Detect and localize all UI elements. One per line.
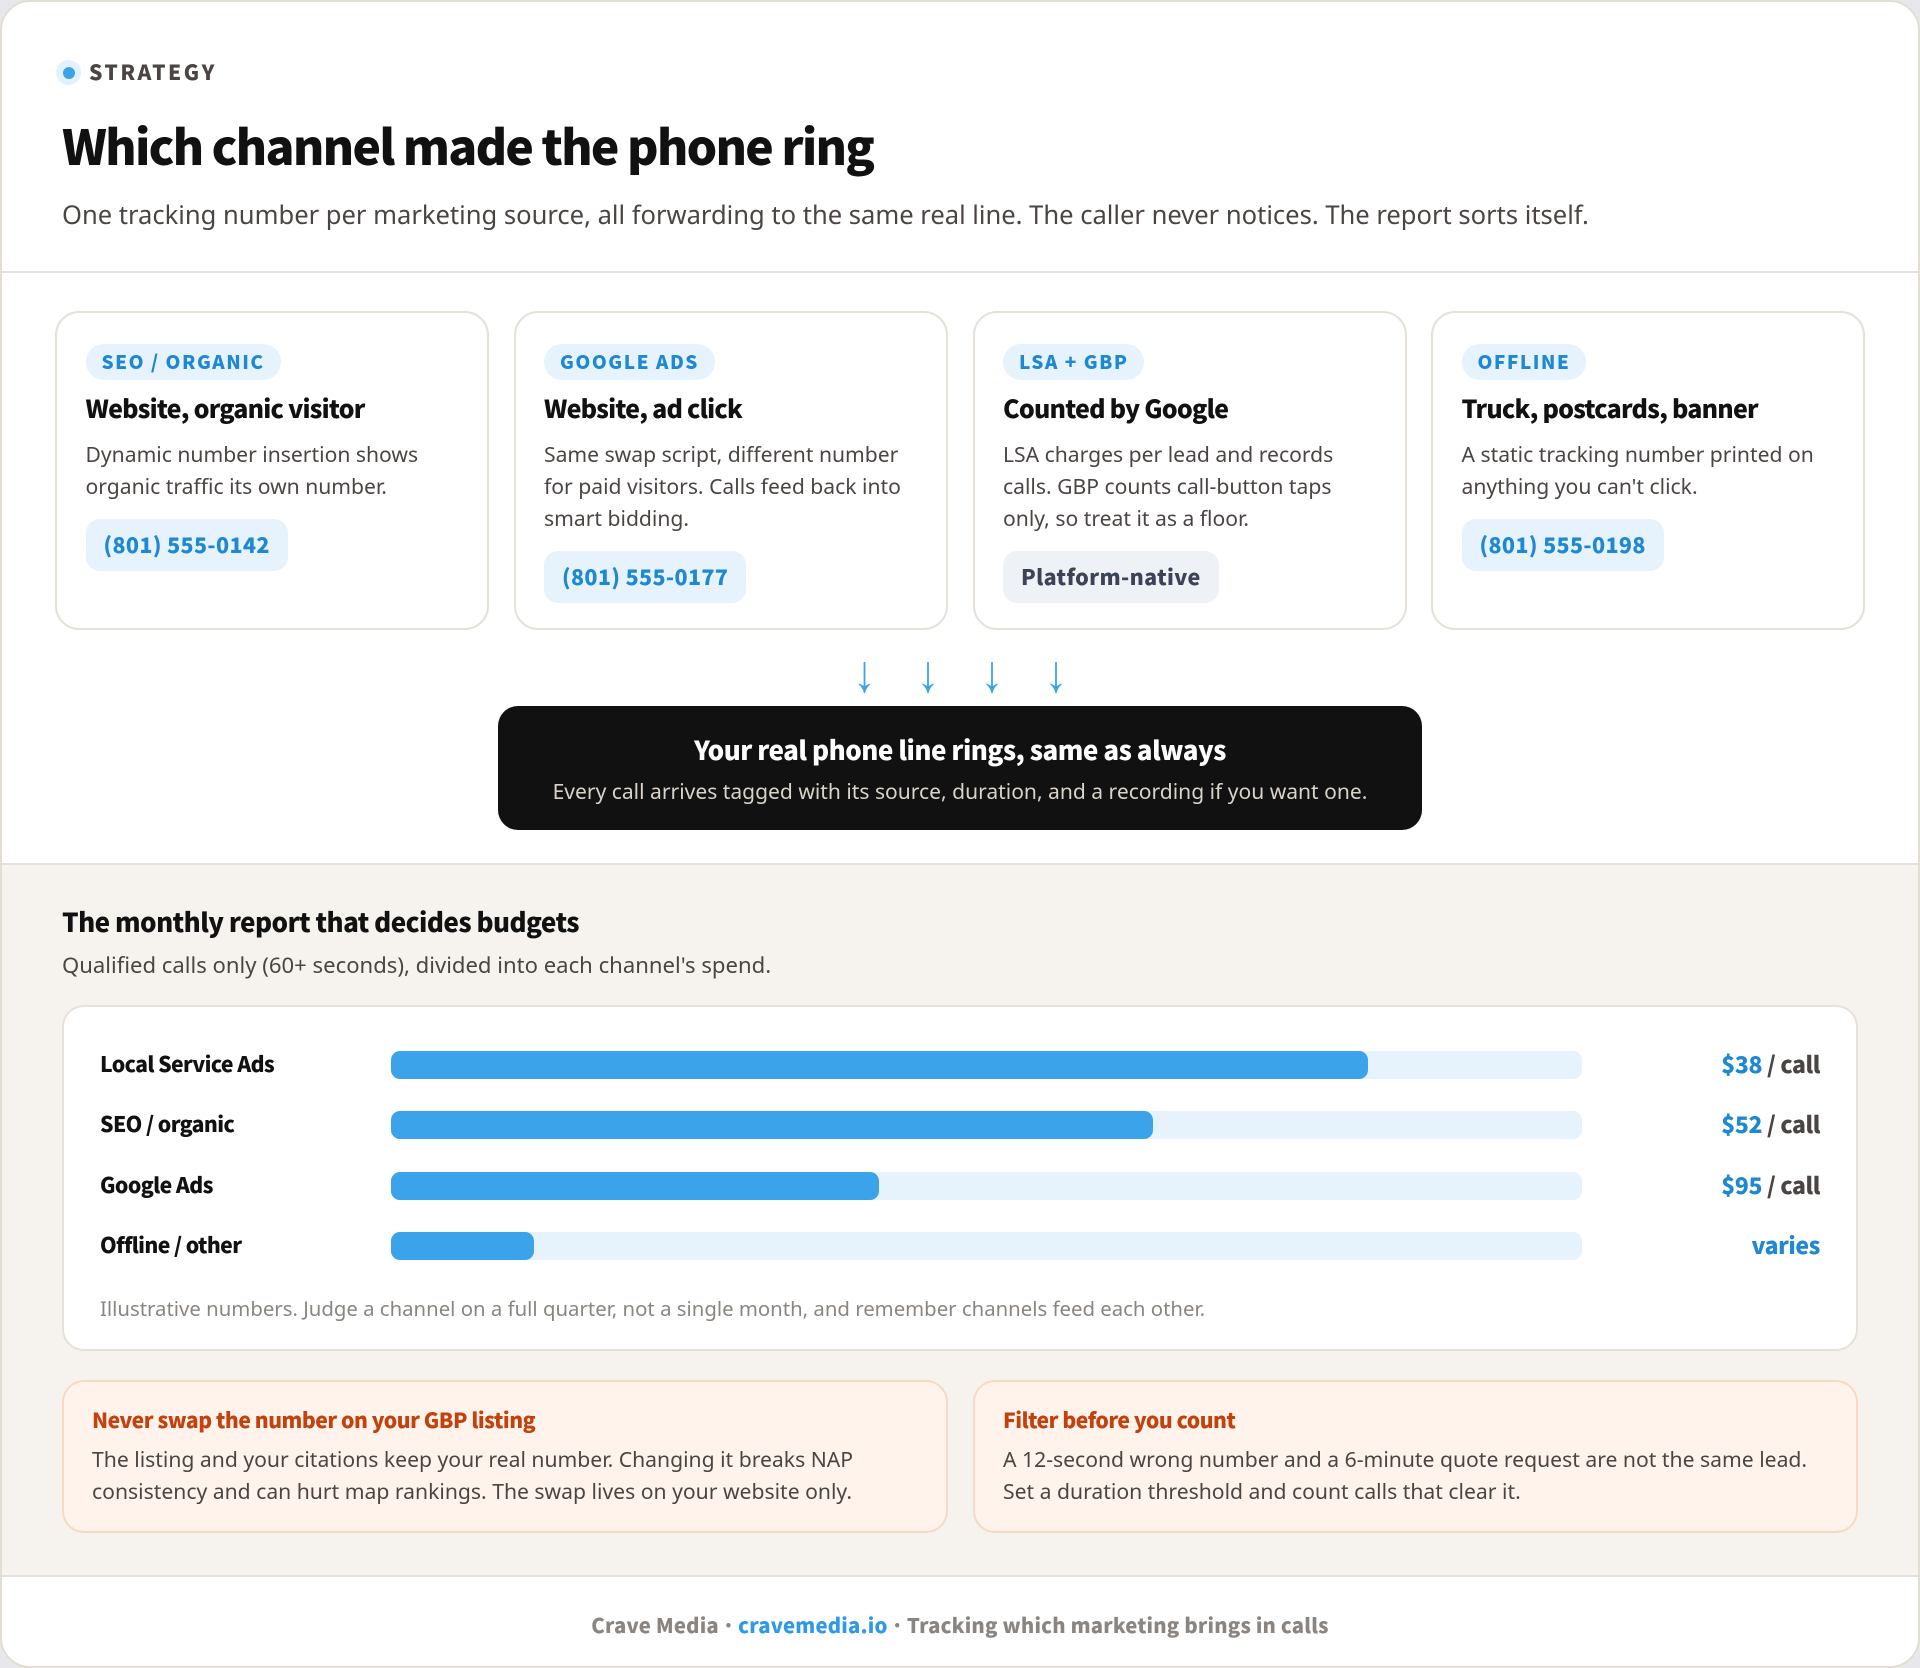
- box heading: Your real phone line rings, same as always: [694, 731, 1226, 768]
- description: only, so treat it as a floor.: [1003, 504, 1249, 533]
- description: calls. GBP counts call-button taps: [1003, 472, 1331, 501]
- tag: [1462, 344, 1586, 380]
- row: Google Ads: [100, 1166, 1820, 1200]
- subtitle: One tracking number per marketing source, all forwarding to the same real line. The caller never notices. The report sorts itself.: [62, 198, 1589, 232]
- callout: never swap: [62, 1380, 948, 1533]
- callout: filter: [973, 1380, 1858, 1533]
- callout text: The listing and your citations keep your real number. Changing it breaks NAP: [92, 1445, 853, 1474]
- phone number: (801) 555-0142: [104, 528, 270, 560]
- platform chip: Platform-native: [1021, 560, 1201, 592]
- description: [544, 440, 901, 533]
- card heading: Website, ad click: [544, 390, 742, 426]
- arrow 2: [922, 662, 934, 692]
- row: Local Service Ads: $38 / call: [1721, 1046, 1820, 1080]
- row: Google Ads: $95 / call: [1721, 1166, 1820, 1200]
- panel: Google Ads: [514, 311, 948, 630]
- callout text: [1003, 1445, 1807, 1506]
- row: Local Service Ads: [100, 1046, 1820, 1080]
- section subtitle: Qualified calls only (60+ seconds), divided into each channel's spend.: [62, 950, 771, 980]
- header divider: [2, 271, 1920, 273]
- description: smart bidding.: [544, 504, 689, 533]
- tag: LSA + GBP: [1019, 348, 1128, 375]
- row: SEO organic: $52 / call: [1721, 1106, 1820, 1140]
- arrow 4: [1050, 662, 1062, 692]
- report section: [2, 863, 1920, 1577]
- platform chip: [1003, 550, 1219, 602]
- arrow 3: [986, 662, 998, 692]
- title: Which channel made the phone ring: [62, 109, 873, 179]
- tag: [544, 344, 715, 380]
- description: organic traffic its own number.: [86, 472, 387, 501]
- callout text: A 12-second wrong number and a 6-minute quote request are not the same lead.: [1003, 1445, 1807, 1474]
- description: [86, 440, 418, 501]
- box text: Every call arrives tagged with its source, duration, and a recording if you want one.: [553, 777, 1367, 806]
- phone number: [544, 550, 746, 602]
- footer: Crave Media · cravemedia.io · Tracking which marketing brings in calls: [591, 1609, 1329, 1639]
- tag: [1003, 344, 1144, 380]
- real phone line box: [498, 706, 1422, 830]
- description: LSA charges per lead and records: [1003, 440, 1333, 469]
- card heading: Counted by Google: [1003, 390, 1228, 426]
- description: anything you can't click.: [1462, 472, 1698, 501]
- row: SEO organic: [100, 1106, 1820, 1140]
- description: Same swap script, different number: [544, 440, 898, 469]
- phone number: (801) 555-0198: [1480, 528, 1646, 560]
- phone number: [1462, 518, 1664, 570]
- bar chart panel: [62, 1005, 1858, 1351]
- icon: status dot: [56, 60, 81, 85]
- callout text: [92, 1445, 853, 1506]
- description: A static tracking number printed on: [1462, 440, 1814, 469]
- tag: GOOGLE ADS: [560, 348, 699, 375]
- callout text: Set a duration threshold and count calls that clear it.: [1003, 1477, 1521, 1506]
- description: Dynamic number insertion shows: [86, 440, 418, 469]
- tag: SEO / ORGANIC: [102, 348, 265, 375]
- card heading: Truck, postcards, banner: [1462, 390, 1758, 426]
- callout heading: Filter before you count: [1003, 1405, 1235, 1435]
- description: [1462, 440, 1814, 501]
- callout heading: Never swap the number on your GBP listing: [92, 1405, 535, 1435]
- header eyebrow: [56, 57, 217, 87]
- tag: OFFLINE: [1478, 348, 1570, 375]
- eyebrow label: STRATEGY: [89, 57, 217, 87]
- row: Local Service Ads: Local Service Ads: [100, 1048, 274, 1079]
- card heading: Website, organic visitor: [86, 390, 365, 426]
- row: Offline other: [100, 1226, 1820, 1260]
- arrows to phone line: [858, 662, 1062, 694]
- description: [1003, 440, 1333, 533]
- arrow 1: [859, 662, 870, 692]
- row: SEO organic: SEO / organic: [100, 1108, 234, 1139]
- panel: SEO organic: [55, 311, 489, 630]
- row: Google Ads: Google Ads: [100, 1168, 213, 1200]
- row: Offline other: varies: [1752, 1226, 1820, 1260]
- chart footnote: Illustrative numbers. Judge a channel on a full quarter, not a single month, and remember channels feed each other.: [100, 1294, 1205, 1322]
- row: Offline other: Offline / other: [100, 1229, 241, 1260]
- phone number: (801) 555-0177: [562, 560, 728, 592]
- panel: LSA GBP: [972, 311, 1406, 630]
- description: for paid visitors. Calls feed back into: [544, 472, 901, 501]
- panel: offline: [1431, 311, 1865, 630]
- tag: [86, 344, 281, 380]
- callout text: consistency and can hurt map rankings. The swap lives on your website only.: [92, 1477, 852, 1506]
- phone number: [86, 518, 288, 570]
- section heading: The monthly report that decides budgets: [62, 903, 579, 940]
